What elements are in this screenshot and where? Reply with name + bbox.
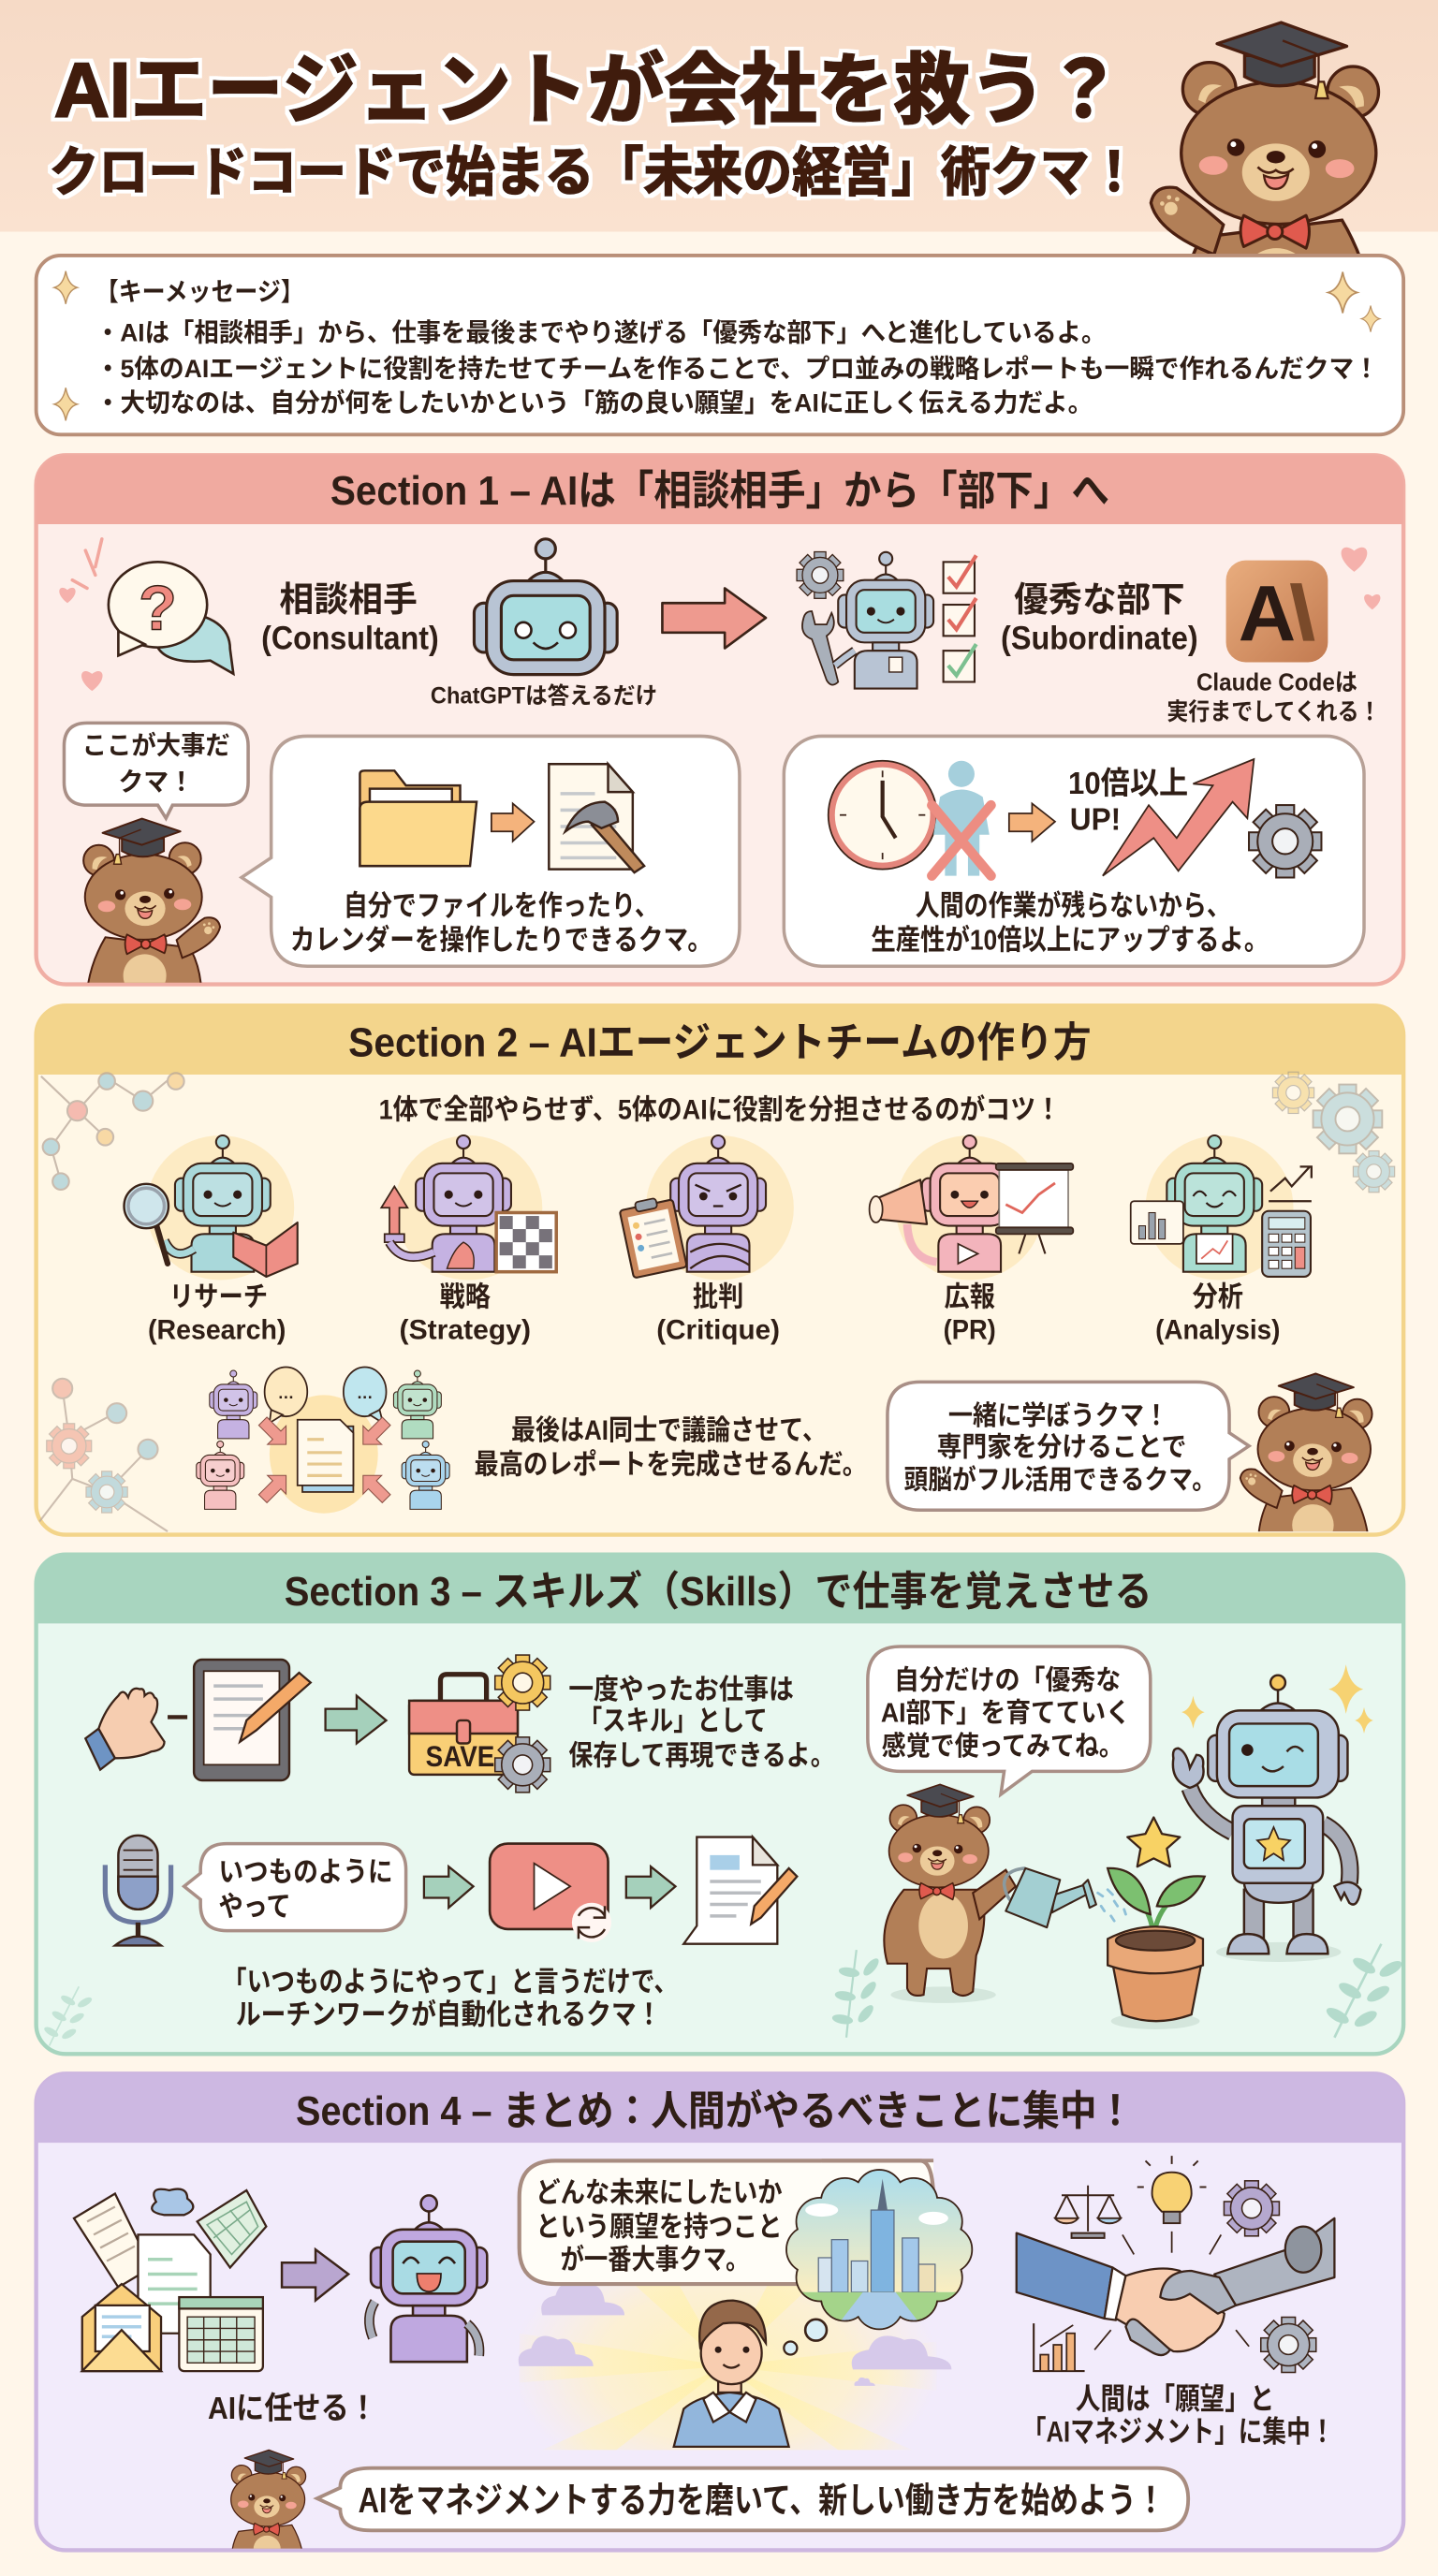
key message line 3: ・大切なのは、自分が何をしたいかという「筋の良い願望」をAIに正しく伝える力だよ。 <box>95 388 1093 417</box>
speech bubble: grow your ai: AI部下」を育てていく <box>881 1699 1131 1729</box>
speech bubble: grow your ai: 感覚で使ってみてね。 <box>882 1732 1123 1762</box>
icon: microphone <box>105 1836 171 1945</box>
text: 人間の作業が残らないから、 <box>916 889 1231 922</box>
title: AIエージェントが会社を救う？ <box>54 48 1123 134</box>
icon: tablet and pencil <box>168 1660 311 1780</box>
arrow <box>662 588 766 649</box>
text: human focus: 「AIマネジメント」に集中！ <box>1022 2415 1334 2449</box>
label: (Analysis) <box>1155 1315 1280 1346</box>
water drops <box>1098 1890 1125 1921</box>
label: 10x up: UP! <box>1070 802 1121 837</box>
illustration: person <box>674 2301 789 2447</box>
speech bubble: 頭脳がフル活用できるクマ。 <box>903 1464 1216 1495</box>
illustration: thought cloud with future city <box>784 2169 973 2355</box>
sparkles <box>54 271 1380 420</box>
caption: claude code: Claude Codeは <box>1196 669 1357 695</box>
label: subordinate <box>1001 580 1198 656</box>
speech bubble: call to action: AIをマネジメントする力を磨いて、新しい働き方を始めよう！ <box>359 2481 1166 2520</box>
header band <box>0 0 1438 232</box>
label: consultant: (Consultant) <box>261 620 439 656</box>
key message panel <box>37 256 1403 434</box>
big robot <box>1173 1676 1360 1962</box>
label: consultant <box>261 580 439 656</box>
robot: critique <box>619 1135 794 1346</box>
text: skills: 保存して再現できるよ。 <box>568 1740 835 1771</box>
section 3 heading: Section 3 – スキルズ（Skills）で仕事を覚えさせる <box>285 1569 1152 1615</box>
section 4 heading: Section 4 – まとめ：人間がやるべきことに集中！ <box>296 2088 1134 2134</box>
speech bubble: grow your ai <box>868 1647 1151 1794</box>
key message line 2: ・5体のAIエージェントに役割を持たせてチームを作ることで、プロ並みの戦略レポートも一瞬で作れるんだクマ！ <box>95 354 1379 383</box>
panel: section 2 <box>37 1005 1403 1563</box>
caption: claude code <box>1167 669 1381 725</box>
panel: productivity <box>784 736 1364 966</box>
text: skills: 「スキル」として <box>579 1705 768 1736</box>
panel: section 3 <box>37 1555 1404 2054</box>
robot: strategy <box>381 1135 556 1346</box>
text: 生産性が10倍以上にアップするよ。 <box>871 924 1269 957</box>
speech bubble: desired future: という願望を持つこと <box>536 2212 783 2243</box>
illustration: agents discussing a report: … <box>357 1383 373 1402</box>
icon: question speech bubbles <box>109 562 233 674</box>
bear mascot <box>82 818 221 983</box>
icon: save toolbox with gears: SAVE <box>426 1739 494 1773</box>
robot: research <box>125 1135 298 1346</box>
speech bubble: desired future: が一番大事クマ。 <box>561 2244 749 2276</box>
bear speech bubble: クマ！ <box>118 767 194 796</box>
illustration: sunburst <box>520 2286 932 2451</box>
panel: section 4 <box>37 2073 1403 2574</box>
illustration: agents discussing a report <box>197 1368 449 1514</box>
decorative leaves <box>43 1943 1404 2046</box>
icon: watering can <box>1005 1868 1096 1927</box>
label: (Research) <box>148 1315 286 1346</box>
label <box>1155 1282 1280 1346</box>
speech bubble: grow your ai: 自分だけの「優秀な <box>894 1666 1121 1696</box>
text: カレンダーを操作したりできるクマ。 <box>290 924 712 957</box>
label: (Critique) <box>656 1315 780 1346</box>
icon: hand <box>85 1689 165 1770</box>
speech bubble: desired future: どんな未来にしたいか <box>536 2177 783 2208</box>
speech bubble: 一緒に学ぼうクマ！ <box>948 1401 1168 1431</box>
decorative hearts <box>59 539 1380 691</box>
subtitle: クロードコードで始まる「未来の経営」術クマ！ <box>50 143 1139 203</box>
bear mascot <box>230 2449 307 2549</box>
arrow <box>492 803 535 842</box>
label: 広報 <box>944 1282 995 1313</box>
caption: claude code: 実行までしてくれる！ <box>1167 699 1381 725</box>
label: 戦略 <box>440 1282 491 1313</box>
speech bubble: call to action <box>317 2468 1188 2530</box>
key message heading: 【キーメッセージ】 <box>95 277 304 306</box>
label: 分析 <box>1193 1282 1243 1313</box>
icon: folder <box>360 770 477 866</box>
arrow <box>626 1866 675 1908</box>
icon: document with pencil <box>683 1837 797 1944</box>
icon: claude code logo: A <box>1239 570 1296 658</box>
text: human focus: 人間は「願望」と <box>1076 2381 1274 2415</box>
section 2 heading: Section 2 – AIエージェントチームの作り方 <box>348 1020 1092 1066</box>
arrow <box>326 1696 387 1744</box>
label: 批判 <box>693 1282 743 1313</box>
icon: play button with repeat <box>490 1844 611 1942</box>
label: 10x up: 10倍以上 <box>1068 767 1188 801</box>
bear speech bubble <box>64 723 248 818</box>
robot: pr <box>870 1135 1073 1346</box>
icon group: judgement, idea, gear, chart <box>1034 2156 1316 2372</box>
text: 自分でファイルを作ったり、 <box>344 889 659 922</box>
label: subordinate: (Subordinate) <box>1001 620 1198 656</box>
text: routine automation <box>223 1966 678 2031</box>
intro text: 1体で全部やらせず、5体のAIに役割を分担させるのがコツ！ <box>379 1093 1061 1125</box>
text: routine automation: 「いつものようにやって」と言うだけで、 <box>223 1966 678 1998</box>
icon: question speech bubbles: ? <box>139 574 177 643</box>
text: final report: 最後はAI同士で議論させて、 <box>511 1415 827 1446</box>
panel: file operations <box>242 736 740 966</box>
text: routine automation: ルーチンワークが自動化されるクマ！ <box>236 1998 662 2031</box>
decorative gears top right <box>1272 1072 1395 1193</box>
icon: rising zigzag arrow <box>1103 759 1254 876</box>
speech bubble <box>888 1382 1249 1510</box>
text: final report <box>474 1415 867 1481</box>
label: 10x up <box>1068 767 1188 837</box>
decorative network bottom left <box>39 1379 168 1531</box>
bear with watering can <box>884 1784 1016 2003</box>
bear mascot <box>1240 1372 1372 1531</box>
text: human focus <box>1022 2381 1334 2449</box>
label: (PR) <box>944 1315 996 1346</box>
bear speech bubble: ここが大事だ <box>82 731 230 760</box>
icon: gear <box>1249 805 1321 877</box>
text: skills <box>568 1675 835 1771</box>
icon: star and plant pot <box>1108 1818 1205 2029</box>
decorative network top left <box>41 1073 184 1190</box>
text: skills: 一度やったお仕事は <box>568 1675 794 1705</box>
icon: clock <box>829 761 937 870</box>
illustration: agents discussing a report: … <box>278 1383 294 1402</box>
icon: claude code logo <box>1226 561 1328 662</box>
key message line 1: ・AIは「相談相手」から、仕事を最後までやり遂げる「優秀な部下」へと進化しているよ。 <box>95 317 1106 346</box>
arrow <box>424 1866 474 1908</box>
icon: pile of documents <box>74 2189 266 2371</box>
label: (Strategy) <box>400 1315 531 1346</box>
speech bubble: as usual <box>184 1844 406 1931</box>
sparkles <box>1181 1664 1373 1734</box>
section 1 heading: Section 1 – AIは「相談相手」から「部下」へ <box>330 468 1109 514</box>
speech bubble: desired future <box>520 2160 933 2284</box>
header bear mascot <box>1151 22 1379 350</box>
label <box>656 1282 780 1346</box>
speech bubble: as usual: やって <box>218 1892 291 1923</box>
icon: save toolbox with gears <box>409 1655 550 1793</box>
label: リサーチ <box>169 1282 268 1313</box>
icon: subordinate robot with tools and checklist <box>797 552 976 689</box>
speech bubble: as usual: いつものように <box>218 1857 393 1888</box>
label <box>400 1282 531 1346</box>
icon: happy robot <box>369 2195 487 2362</box>
label: subordinate: 優秀な部下 <box>1014 580 1185 619</box>
icon: document with hammer <box>549 764 644 872</box>
caption: chatgpt: ChatGPTは答えるだけ <box>431 682 657 709</box>
label <box>148 1282 286 1346</box>
arrow <box>1009 803 1055 842</box>
illustration: handshake <box>1017 2218 1334 2355</box>
robot: analysis <box>1131 1135 1312 1346</box>
panel: section 1 <box>37 455 1403 1015</box>
label <box>944 1282 996 1346</box>
text: leave it to ai: AIに任せる！ <box>208 2392 377 2426</box>
icon: person crossed out <box>932 761 991 876</box>
decorative clouds <box>519 2282 951 2386</box>
speech bubble: 専門家を分けることで <box>937 1432 1186 1462</box>
arrow <box>282 2249 348 2301</box>
label: consultant: 相談相手 <box>279 580 418 619</box>
icon: consultant robot <box>474 539 617 675</box>
text: final report: 最高のレポートを完成させるんだ。 <box>474 1450 867 1481</box>
